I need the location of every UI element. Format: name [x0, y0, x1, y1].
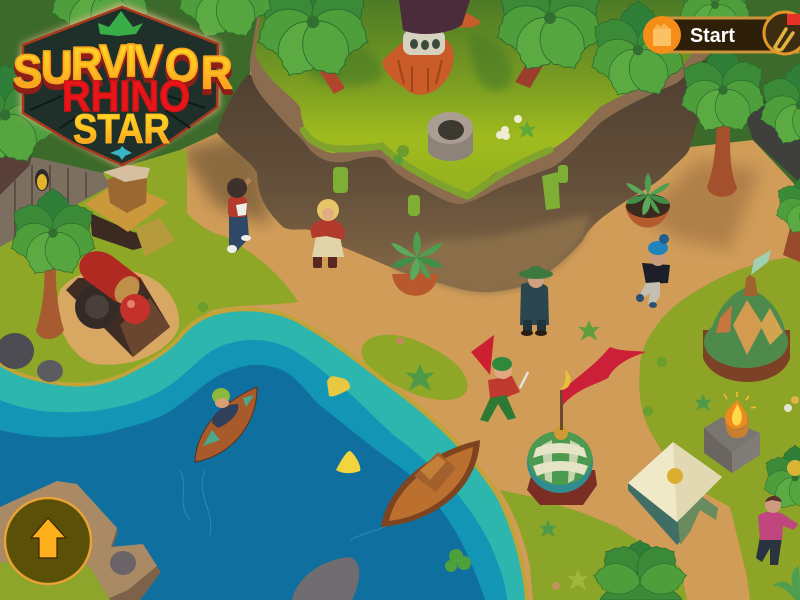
start label: Start: [690, 25, 735, 47]
leaf emblem: [98, 11, 143, 36]
fence right: [740, 100, 800, 183]
rock in water: [292, 557, 359, 600]
central tree roots: [382, 0, 480, 95]
start bar: [665, 18, 798, 52]
flowers: [393, 115, 536, 165]
plateau cliff: [217, 60, 715, 292]
top forest background: [0, 0, 800, 190]
water: mid teal: [0, 340, 507, 600]
character: man in green hat: [519, 266, 553, 336]
palm left: [5, 188, 101, 339]
palm plateau left: [250, 0, 376, 94]
gift icon: [643, 16, 681, 54]
plateau grass top: [255, 0, 705, 197]
bush bottom right: [760, 445, 800, 513]
start button: [643, 12, 800, 54]
hut: [85, 165, 175, 257]
logo word: survivor shadow: SURVIVOR: [13, 38, 233, 103]
small ground plants and pebbles: [198, 302, 799, 590]
up arrow button: [5, 498, 91, 584]
floating buoy: [327, 376, 350, 397]
palm plateau right: [585, 1, 691, 103]
palm right: [675, 45, 771, 197]
fence left: [0, 157, 110, 247]
palm top left corner: [45, 0, 155, 50]
fence planks: [15, 165, 86, 238]
logo word: star: STAR: [73, 105, 170, 152]
character: man in red shirt: [227, 178, 251, 253]
yurt tent: [703, 250, 790, 382]
palm right edge: [772, 174, 800, 262]
shadows on plateau: [290, 34, 512, 91]
water: shallow: [0, 311, 525, 600]
water: shore rim: [0, 307, 529, 600]
character: green-cap warrior: [471, 335, 528, 422]
tool icon button: [764, 12, 800, 54]
logo word: rhino: RHINO: [62, 72, 190, 121]
tree trunk left edge: [0, 130, 35, 195]
left stone rocks: [0, 333, 63, 382]
potted plant right: [625, 173, 670, 228]
lily pad: [445, 549, 471, 572]
wooden boat: [381, 440, 480, 527]
ground: grass patch: [361, 335, 468, 400]
logo word: survivor face: SURVIVOR: [13, 34, 233, 98]
floating buoy: [336, 451, 360, 473]
palm left edge: [0, 63, 60, 170]
ground: right grass: [639, 257, 800, 600]
character: blond woman: [310, 199, 345, 268]
badge outline: [23, 7, 218, 165]
white canopy tent: [628, 442, 722, 545]
water ripples: [180, 470, 395, 540]
ground: left grass: [0, 150, 298, 386]
cliff hanging vines: [333, 165, 568, 216]
plateau rim: [250, 0, 715, 204]
palm right edge top: [755, 63, 800, 150]
badge spokes: [30, 96, 205, 128]
character: boy blue cap: [636, 234, 670, 308]
fence lamp: [35, 169, 49, 191]
red pennant flag: [560, 347, 646, 430]
sand patch under cannon: [57, 269, 179, 365]
plant bottom corner: [772, 566, 800, 600]
palm plateau mid: [490, 0, 610, 88]
badge glow: [21, 4, 220, 167]
palm bottom: [591, 537, 689, 600]
striped dome tent: [527, 426, 597, 505]
stone well: [427, 112, 473, 161]
rock island bottom left: [0, 481, 161, 600]
fire brazier: [704, 392, 760, 473]
water: deep: [0, 365, 485, 600]
sand shadow right of cliff: [640, 160, 760, 250]
game logo: [13, 4, 233, 167]
sand shadow under forest: [180, 130, 270, 225]
palm top left behind logo: [172, 0, 278, 45]
palm top corner: [675, 0, 755, 45]
gem: [110, 146, 132, 160]
small canoe with rider: [195, 387, 257, 462]
ground: bottom grass: [500, 490, 687, 600]
plateau moss edge: [303, 130, 550, 196]
arrow: [31, 518, 66, 558]
cliff lower light band: [395, 215, 590, 292]
pink villager: [756, 496, 798, 565]
potted plant centre: [391, 231, 443, 296]
cannon: [66, 251, 170, 357]
